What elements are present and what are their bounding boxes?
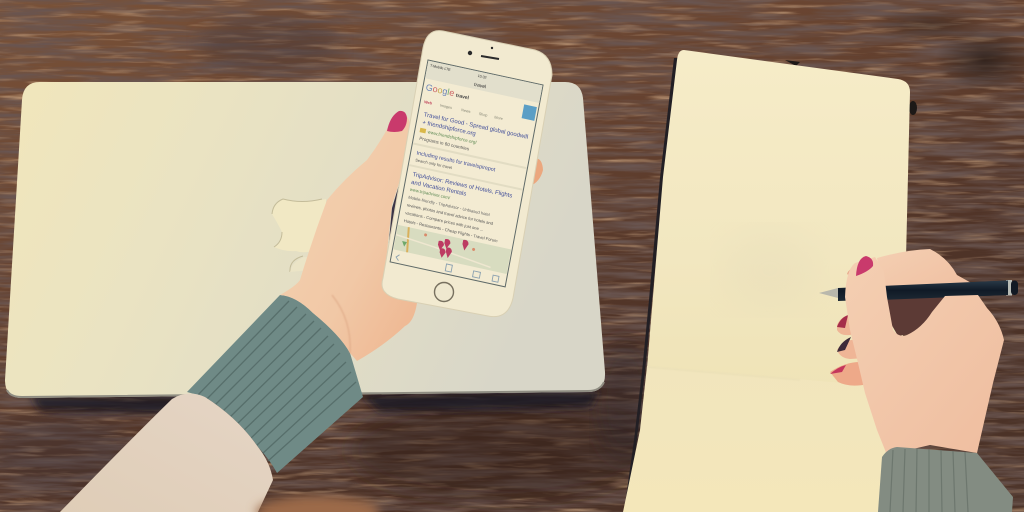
search result: Travel for Good (418, 112, 529, 163)
fingers behind phone (530, 158, 543, 186)
pen (819, 280, 1018, 301)
Google search bar (423, 82, 537, 128)
left sleeve ribbed cuff (187, 295, 363, 473)
search result: TripAdvisor: reviews, photos and travel advice for hotels and (406, 202, 494, 226)
phone body (382, 31, 552, 317)
laptop (5, 82, 605, 414)
browser toolbar icons (396, 253, 499, 282)
search result: TripAdvisor: Hotels - Restaurants - Cheap Flights - Travel Forum (403, 218, 499, 243)
lower fingers (830, 315, 868, 386)
phone camera and speaker (468, 47, 499, 59)
fingers above pen (877, 249, 975, 300)
notebook lower page (623, 366, 900, 512)
thumb nail (856, 256, 873, 276)
index fingertip behind thumb (847, 268, 856, 280)
laptop shadow on desk (30, 390, 600, 414)
Google search bar: Images (439, 103, 452, 110)
Google search bar: Google (425, 82, 455, 98)
map with red pins (393, 225, 511, 274)
Google search bar: More (494, 115, 503, 121)
pen barrel over fingers (880, 280, 1008, 300)
Google search bar: Web (424, 100, 433, 106)
browser status and URL bar: 10:32 (477, 74, 487, 80)
shadow between thumb and phone (388, 165, 405, 252)
phone screen (390, 60, 543, 287)
left arm beige sleeve (60, 393, 273, 512)
icon: apple logo on lid (272, 199, 326, 272)
search result: TripAdvisor: Mobile-friendly - TripAdvisor - Unbiased hotel (408, 195, 490, 217)
phone home button (434, 282, 454, 302)
right hand writing (830, 249, 975, 386)
phone (382, 31, 552, 317)
search result: TripAdvisor: www.tripadvisor.com/ (409, 187, 451, 201)
notebook upper page (647, 50, 910, 392)
browser status and URL bar: T-Mobile LTE (430, 64, 452, 72)
thumb nail (387, 111, 407, 132)
search result: including results: Search only for travel (415, 157, 453, 170)
search result: TripAdvisor: TripAdvisor: Reviews of Hotels, Flights (412, 172, 513, 200)
search result: TripAdvisor (403, 172, 513, 245)
back of right hand and thumb (845, 256, 1004, 455)
blurred head at bottom edge (256, 496, 380, 512)
notebook dark cover edge (624, 58, 678, 512)
browser status and URL bar: travel (474, 82, 487, 90)
Google search bar: News (461, 108, 471, 114)
search result: TripAdvisor: and Vacation Rentals (410, 180, 467, 198)
soft shadow on page (720, 230, 820, 310)
search result: including results (409, 143, 527, 191)
search result: including results: Including results for travelspirepot (416, 150, 496, 174)
search result: Travel for Good: Programs in 60 countries (419, 136, 470, 152)
notebook (623, 50, 917, 512)
search result: Travel for Good: www.friendshipforce.org/ (427, 129, 478, 145)
shadow between fingers and thumb (886, 290, 950, 336)
search result: TripAdvisor: vacations - Compare prices with just one ... (405, 210, 484, 232)
search result: Travel for Good: + friendshipforce.org (422, 120, 476, 138)
left hand holding phone (280, 111, 543, 361)
browser status and URL bar (425, 61, 542, 103)
Google search bar: travel (455, 93, 470, 102)
Google search bar: Shop (478, 112, 488, 118)
right sleeve cuff (878, 447, 1013, 512)
search result: Travel for Good: Travel for Good - Spread global goodwill (423, 112, 529, 141)
finger nails (837, 315, 848, 328)
